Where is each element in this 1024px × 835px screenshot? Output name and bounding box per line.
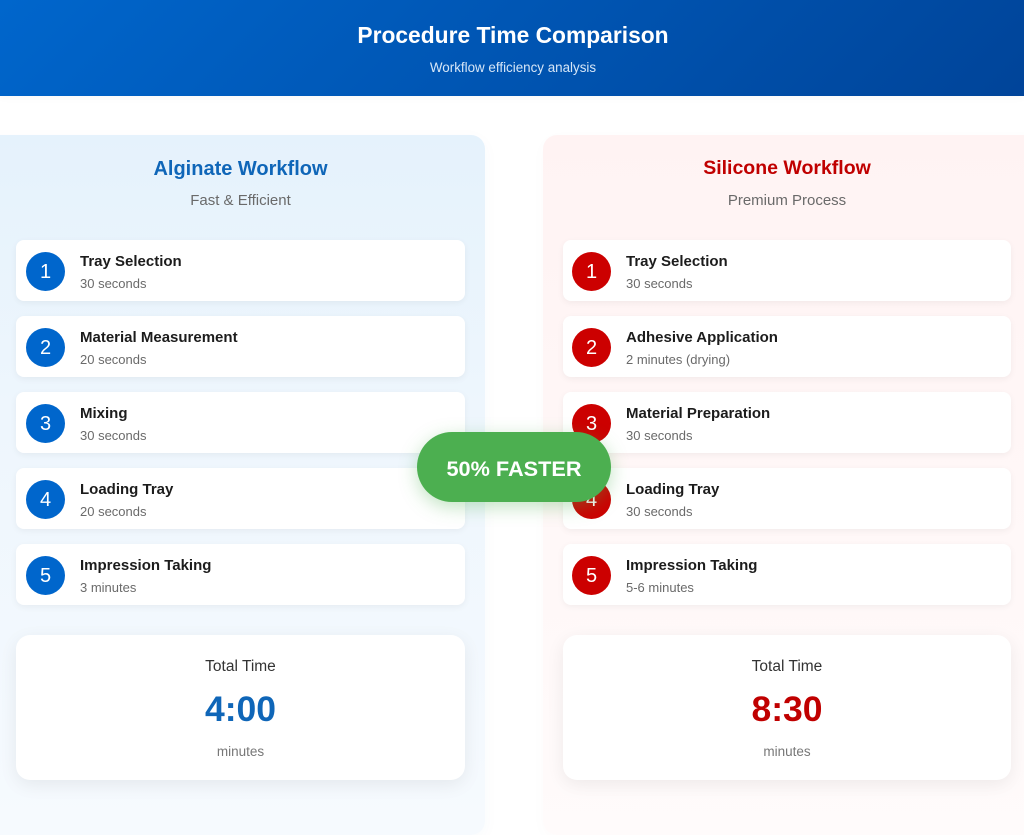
step: tray selection	[16, 240, 465, 301]
step: impression taking: Impression Taking	[80, 557, 211, 574]
step: tray selection	[563, 240, 1011, 301]
callout: 50% faster badge	[417, 432, 611, 502]
step: tray selection: 30 seconds	[80, 276, 146, 291]
step: loading tray: 4	[586, 489, 597, 511]
title: Procedure Time Comparison	[357, 22, 669, 48]
step: adhesive application	[563, 316, 1011, 377]
step: mixing	[16, 392, 465, 453]
step: tray selection: 1	[40, 261, 51, 283]
step: adhesive application: 2	[586, 337, 597, 359]
step: material measurement: Material Measurement	[80, 329, 238, 346]
step: mixing: 30 seconds	[80, 428, 146, 443]
silicone heading: Silicone Workflow	[703, 157, 871, 179]
step: loading tray: Loading Tray	[80, 481, 173, 498]
subtitle: Workflow efficiency analysis	[430, 60, 596, 75]
alginate total time: minutes	[217, 744, 264, 759]
step: mixing: 3	[40, 413, 51, 435]
step: tray selection: Tray Selection	[626, 253, 728, 270]
silicone total time: 8:30	[751, 689, 823, 729]
step: impression taking: 5	[40, 565, 51, 587]
step: material preparation: Material Preparation	[626, 405, 770, 422]
step: loading tray: 30 seconds	[626, 504, 692, 519]
step: impression taking: 5-6 minutes	[626, 580, 694, 595]
step: material measurement: 20 seconds	[80, 352, 146, 367]
callout: 50% faster badge: 50% FASTER	[446, 456, 582, 481]
step: impression taking: 5	[586, 565, 597, 587]
step: impression taking: Impression Taking	[626, 557, 757, 574]
alginate subtitle: Fast & Efficient	[190, 192, 291, 209]
step: impression taking	[563, 544, 1011, 605]
panel: alginate background	[0, 135, 485, 835]
step: loading tray: 20 seconds	[80, 504, 146, 519]
step: impression taking	[16, 544, 465, 605]
alginate total time: Total Time	[205, 658, 276, 675]
step: material measurement	[16, 316, 465, 377]
step: material preparation: 30 seconds	[626, 428, 692, 443]
step: material preparation: 3	[586, 413, 597, 435]
step: adhesive application: 2 minutes (drying)	[626, 352, 730, 367]
silicone total time: minutes	[763, 744, 811, 759]
step: loading tray: 4	[40, 489, 51, 511]
step: tray selection: Tray Selection	[80, 253, 182, 270]
step: material preparation	[563, 392, 1011, 453]
silicone total time	[563, 635, 1011, 780]
step: loading tray	[16, 468, 465, 529]
step: loading tray: Loading Tray	[626, 481, 719, 498]
silicone subtitle: Premium Process	[728, 192, 846, 209]
alginate heading: Alginate Workflow	[153, 158, 328, 180]
step: tray selection: 30 seconds	[626, 276, 692, 291]
alginate total time: 4:00	[205, 689, 276, 729]
step: loading tray	[563, 468, 1011, 529]
header banner	[0, 0, 1024, 96]
step: material measurement: 2	[40, 337, 51, 359]
step: impression taking: 3 minutes	[80, 580, 136, 595]
step: adhesive application: Adhesive Application	[626, 329, 778, 346]
silicone total time: Total Time	[752, 658, 822, 675]
step: tray selection: 1	[586, 261, 597, 283]
panel: silicone background	[543, 135, 1024, 835]
step: mixing: Mixing	[80, 405, 128, 422]
alginate total time	[16, 635, 465, 780]
